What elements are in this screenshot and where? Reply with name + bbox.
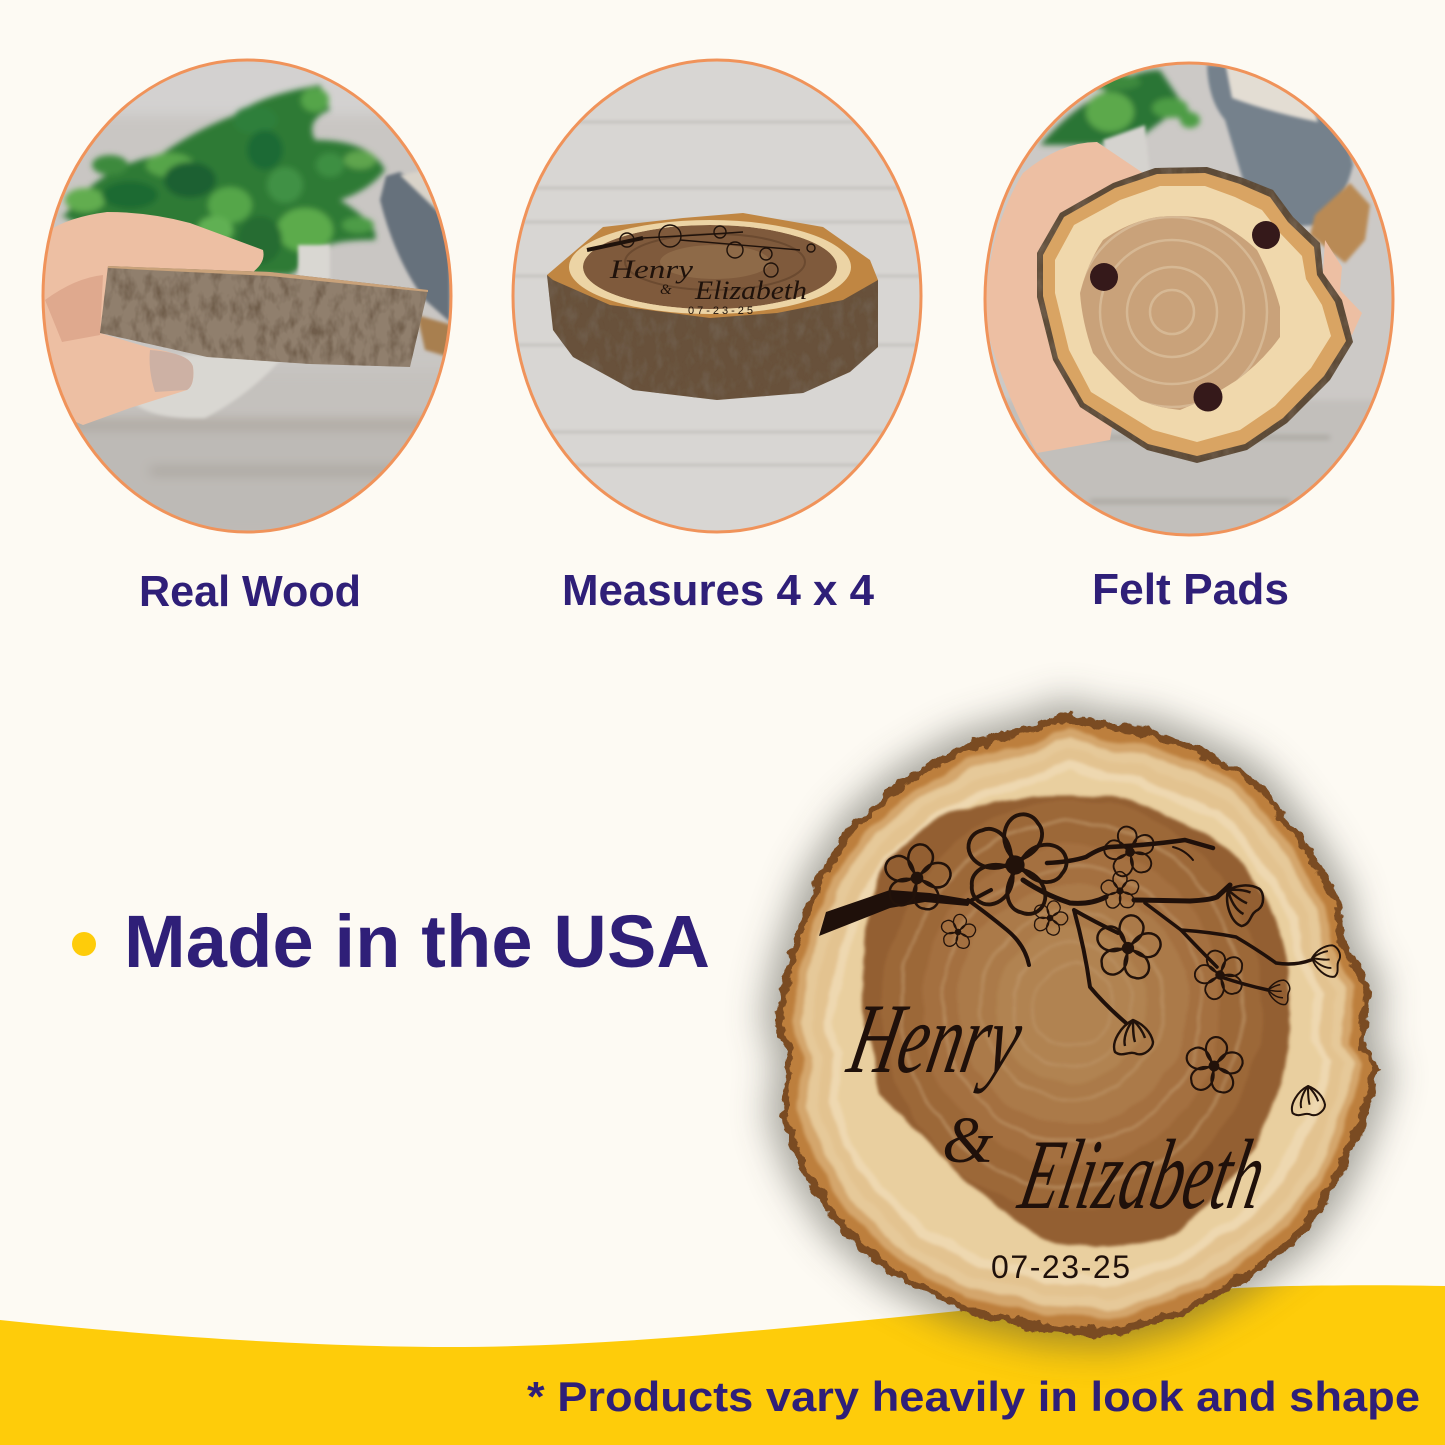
engraved name: elizabeth: Elizabeth xyxy=(1010,1119,1275,1230)
engraved date: 07-23-25 xyxy=(991,1249,1130,1285)
icon: mug interior xyxy=(1225,62,1318,122)
icon: coaster under mug xyxy=(418,314,448,358)
icon: coaster top xyxy=(547,213,878,318)
footer note: * Products vary heavily in look and shape xyxy=(527,1373,1420,1420)
icon: coaster under mug xyxy=(1310,183,1370,263)
engraved ampersand: & xyxy=(942,1104,994,1177)
text: small date: 07-23-25 xyxy=(688,305,753,317)
engraved flowers xyxy=(876,801,1253,1100)
heartwood with rings xyxy=(850,780,1300,1260)
icon: coaster bark side xyxy=(547,275,878,400)
text: small name henry: Henry xyxy=(609,255,694,284)
large coaster xyxy=(763,699,1392,1348)
caption: measures: Measures 4 x 4 xyxy=(562,566,875,615)
sapwood layers xyxy=(792,729,1363,1319)
panel: felt pads photo xyxy=(980,60,1400,540)
icon: coaster underside bark xyxy=(1037,167,1353,463)
icon: felt pad 3 xyxy=(1194,382,1222,412)
engraved name: henry: Henry xyxy=(839,983,1032,1094)
icon: plant xyxy=(1040,70,1200,145)
text: small name elizabeth: Elizabeth xyxy=(694,276,807,305)
icon: bark side of slice xyxy=(100,266,428,367)
icon: heartwood xyxy=(583,225,837,309)
bark outline xyxy=(775,712,1380,1336)
ellipse outline xyxy=(985,63,1393,535)
panel: measures photo xyxy=(510,55,925,540)
bullet: yellow dot xyxy=(72,932,96,956)
caption: felt pads: Felt Pads xyxy=(1092,565,1289,614)
icon: felt pad 2 xyxy=(1252,221,1280,249)
yellow footer wave xyxy=(0,1285,1445,1445)
orange inner bark xyxy=(783,720,1372,1328)
icon: mug interior xyxy=(399,172,436,212)
engraved branch xyxy=(819,840,1311,1023)
heading: made in the usa: Made in the USA xyxy=(124,900,710,983)
icon: engraved branch xyxy=(587,225,815,277)
ellipse outline xyxy=(43,60,451,532)
icon: grey mug xyxy=(380,172,450,322)
caption: real wood: Real Wood xyxy=(139,567,361,616)
icon: pale sapwood xyxy=(1055,186,1331,442)
ellipse outline xyxy=(513,60,921,532)
icon: blurred plant xyxy=(60,85,385,275)
icon: hand holding slice xyxy=(36,212,264,425)
text: small ampersand: & xyxy=(660,282,672,298)
icon: orange sapwood edge xyxy=(1043,173,1346,456)
icon: heartwood with rings xyxy=(1080,216,1280,410)
icon: pot behind slice xyxy=(125,245,330,418)
engraved buds xyxy=(1114,874,1342,1115)
icon: sapwood ring xyxy=(569,220,851,314)
coaster shadow xyxy=(763,699,1392,1348)
icon: pot xyxy=(1101,123,1148,172)
icon: hand xyxy=(985,142,1362,453)
icon: felt pad 1 xyxy=(1090,263,1118,291)
panel: real wood photo xyxy=(36,55,455,540)
icon: grey mug xyxy=(1207,65,1353,227)
